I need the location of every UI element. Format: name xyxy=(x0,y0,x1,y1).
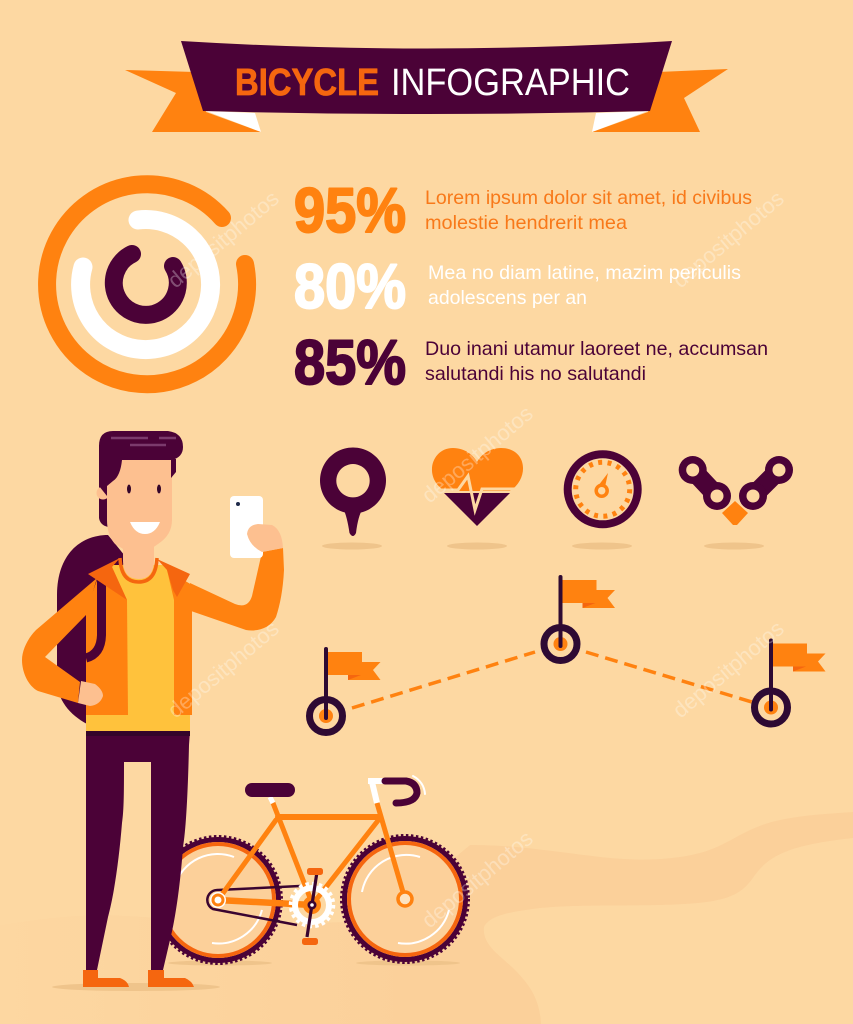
stat row 85% xyxy=(294,328,768,398)
route marker flag 3 xyxy=(754,640,826,724)
middle white ring 80% xyxy=(81,220,211,350)
description: salutandi his no salutandi xyxy=(425,363,646,385)
person xyxy=(22,431,284,991)
phone xyxy=(230,496,263,558)
title text: BICYCLE xyxy=(235,62,379,104)
watermark: depositphotos xyxy=(668,186,789,293)
left arm xyxy=(22,578,97,703)
banner body xyxy=(181,41,672,114)
collar right lapel xyxy=(157,559,190,597)
percentage: 95% xyxy=(294,176,406,246)
chainring xyxy=(290,884,334,926)
neck ring xyxy=(120,558,157,582)
raised hand xyxy=(247,524,283,552)
inner purple ring 85% xyxy=(114,254,178,315)
backpack xyxy=(57,535,125,724)
collar left lapel xyxy=(88,558,127,600)
hair highlights xyxy=(111,438,176,445)
stat row 80% xyxy=(294,252,741,322)
watermark: depositphotos xyxy=(417,401,538,508)
backpack strap xyxy=(86,580,102,658)
title text second word: INFOGRAPHIC xyxy=(391,62,630,104)
route dashed lines xyxy=(352,652,752,708)
route marker flag 1 xyxy=(310,649,380,732)
chain xyxy=(207,886,300,925)
icon: bike chain xyxy=(679,456,793,550)
right ribbon tail xyxy=(592,69,728,132)
shirt xyxy=(86,565,190,731)
stat row 95% xyxy=(294,176,752,246)
hair top xyxy=(99,431,183,496)
bike shadows xyxy=(168,960,272,966)
outer orange ring 95% xyxy=(47,184,247,384)
icon: heart with pulse xyxy=(432,448,523,550)
icon: map pin xyxy=(320,448,386,550)
route marker flag 2 xyxy=(544,577,615,660)
title banner xyxy=(125,41,728,132)
watermark: depositphotos xyxy=(163,616,284,723)
left shoe xyxy=(83,970,129,987)
jacket left panel xyxy=(86,567,128,715)
neck xyxy=(123,540,154,579)
percentage: 85% xyxy=(294,328,406,398)
front hub xyxy=(398,892,412,906)
raised arm xyxy=(190,548,284,630)
head xyxy=(107,460,172,554)
brake lever xyxy=(413,776,425,794)
description: molestie hendrerit mea xyxy=(425,212,627,234)
handlebar xyxy=(385,781,417,803)
icon: speedometer xyxy=(568,454,638,550)
lower hand xyxy=(78,681,103,706)
hair back xyxy=(99,445,120,527)
winding road ground xyxy=(0,812,853,1024)
ground shadow xyxy=(52,983,220,991)
radial progress chart xyxy=(47,184,247,384)
saddle xyxy=(245,783,295,797)
watermark xyxy=(163,186,789,933)
left ribbon tail xyxy=(125,70,261,132)
ear xyxy=(96,486,110,500)
handlebar stem xyxy=(368,781,384,803)
description: Mea no diam latine, mazim periculis xyxy=(428,262,741,284)
description: Lorem ipsum dolor sit amet, id civibus xyxy=(425,187,752,209)
rear wheel xyxy=(154,836,282,964)
watermark: depositphotos xyxy=(163,186,284,293)
legs xyxy=(86,731,190,970)
percentage: 80% xyxy=(294,252,406,322)
rear hub xyxy=(210,892,226,908)
right shoe xyxy=(148,970,194,987)
frame xyxy=(218,803,405,905)
watermark: depositphotos xyxy=(668,616,789,723)
bicycle xyxy=(154,776,468,966)
jacket right panel xyxy=(167,570,192,715)
left ribbon fold xyxy=(206,111,261,132)
waistband shadow xyxy=(86,731,190,736)
right ribbon fold xyxy=(592,111,648,132)
watermark: depositphotos xyxy=(417,826,538,933)
eyes xyxy=(127,484,161,494)
seat post xyxy=(270,797,273,803)
hair right tuft xyxy=(171,459,176,478)
crank and pedals xyxy=(302,868,323,945)
smile xyxy=(130,522,160,534)
description: Duo inani utamur laoreet ne, accumsan xyxy=(425,338,768,360)
description: adolescens per an xyxy=(428,287,587,309)
front wheel xyxy=(342,836,468,962)
